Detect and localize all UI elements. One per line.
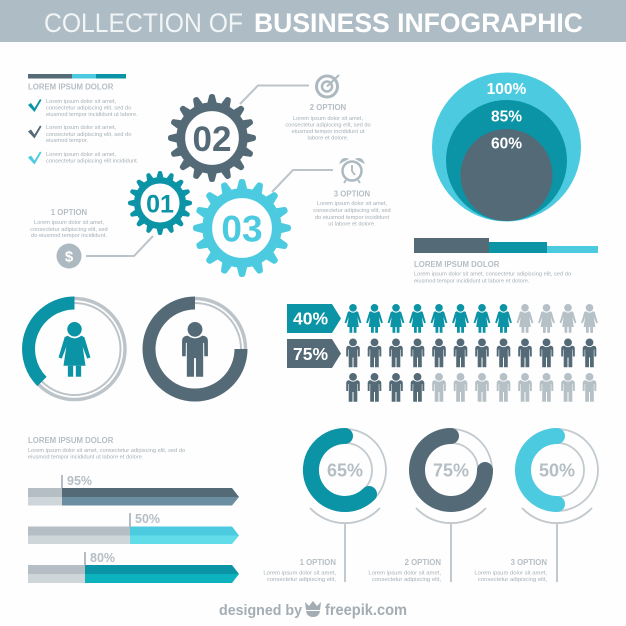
check item 1 bbox=[28, 99, 138, 118]
callout: 1 option: do eiusmod tempor incididunt. bbox=[31, 233, 107, 239]
pictogram row: women 40% bbox=[345, 304, 598, 333]
text block: bars intro: LOREM IPSUM DOLOR bbox=[28, 436, 114, 445]
text block: bars intro bbox=[28, 436, 185, 460]
donut: 50%: 50% bbox=[539, 460, 575, 480]
chart: nested circles: 100% bbox=[487, 81, 527, 98]
callout: 1 option bbox=[30, 208, 153, 268]
option text: Lorem ipsum dolor sit amet, bbox=[474, 570, 547, 576]
stepped legend bar bbox=[414, 238, 598, 253]
checklist heading: LOREM IPSUM DOLOR bbox=[28, 82, 114, 92]
title banner: BUSINESS INFOGRAPHIC bbox=[254, 8, 583, 38]
tag: 75% bbox=[287, 339, 341, 368]
check item 2: eiusmod tempor. bbox=[46, 138, 88, 144]
callout: 2 option: eiusmod tempor incididunt ut bbox=[292, 129, 365, 135]
callout: 1 option: Lorem ipsum dolor sit amet, bbox=[34, 220, 105, 226]
check item 2: consectetur adipiscing elit, sed do bbox=[46, 132, 131, 138]
icon: woman bbox=[59, 322, 90, 377]
footer credit bbox=[219, 601, 407, 619]
text block: circle legend: eiusmod tempor incididunt ut labore et dolore. bbox=[414, 278, 530, 284]
icon: man bbox=[182, 322, 208, 377]
check item 2: Lorem ipsum dolor sit amet, bbox=[46, 125, 117, 131]
text block: circle legend: Lorem ipsum dolor sit amet, consectetur adipiscing elit, sed do bbox=[414, 272, 571, 278]
option text bbox=[474, 558, 547, 583]
gear 01 bbox=[128, 171, 192, 235]
icon: target bbox=[316, 75, 339, 97]
progress bar: 50% bbox=[28, 512, 239, 544]
progress bar: 80%: 80% bbox=[90, 551, 115, 565]
option text: consectetur adipiscing elit, bbox=[478, 577, 547, 583]
icon: freepik crown bbox=[305, 601, 321, 617]
text block: circle legend bbox=[414, 260, 571, 284]
callout: 3 option: ut labore et dolore. bbox=[328, 222, 376, 228]
title banner bbox=[0, 0, 626, 42]
option text: consectetur adipiscing elit, bbox=[372, 577, 441, 583]
connector line bbox=[86, 236, 153, 256]
stand bbox=[522, 508, 592, 582]
callout: 2 option: consectetur adipiscing elit, sed do bbox=[285, 122, 371, 128]
callout: 3 option: 3 OPTION bbox=[334, 190, 371, 198]
icon: alarm clock bbox=[340, 158, 364, 183]
footer credit: designed by bbox=[219, 603, 302, 619]
option text: 1 OPTION bbox=[300, 558, 336, 567]
donut: 75%: 75% bbox=[433, 460, 469, 480]
donut: 50% bbox=[474, 429, 598, 583]
callout: 3 option bbox=[272, 158, 391, 228]
gear 03 bbox=[193, 179, 291, 277]
tag: 75%: 75% bbox=[293, 344, 328, 364]
callout: 2 option bbox=[240, 75, 371, 142]
progress bar: 50%: 50% bbox=[135, 512, 160, 526]
tricolor bar bbox=[28, 74, 126, 78]
title banner: COLLECTION OF bbox=[44, 8, 243, 38]
chart: nested circles: 60% bbox=[491, 136, 522, 152]
pictogram row: men 75% part 1 bbox=[346, 338, 596, 367]
chart: nested circles bbox=[432, 72, 581, 222]
pictogram row: men 75% part 2 bbox=[346, 373, 596, 402]
tag: 40% bbox=[287, 304, 341, 333]
ring: man bbox=[144, 298, 246, 400]
option text: Lorem ipsum dolor sit amet, bbox=[368, 570, 441, 576]
callout: 2 option: 2 OPTION bbox=[310, 103, 347, 112]
gear 01: 01 bbox=[146, 190, 174, 218]
check item 1: Lorem ipsum dolor sit amet, bbox=[46, 99, 117, 105]
donut: 75% bbox=[368, 429, 492, 583]
option text: consectetur adipiscing elit, bbox=[267, 577, 336, 583]
check item 2 bbox=[28, 125, 131, 144]
icon: dollar: $ bbox=[65, 248, 74, 266]
callout: 1 option: 1 OPTION bbox=[51, 208, 88, 217]
text block: circle legend: LOREM IPSUM DOLOR bbox=[414, 260, 500, 269]
connector line bbox=[272, 170, 333, 192]
callout: 3 option: consectetur adipiscing elit, sed bbox=[313, 208, 391, 214]
chart: nested circles: 85% bbox=[491, 108, 522, 126]
callout: 1 option: consectetur adipiscing elit, sed bbox=[30, 227, 108, 233]
progress bar: 95%: 95% bbox=[67, 474, 92, 488]
gear 03: 03 bbox=[221, 208, 263, 250]
donut: 65% bbox=[263, 429, 386, 583]
donut: 65%: 65% bbox=[327, 460, 363, 480]
option text bbox=[368, 558, 441, 583]
callout: 2 option: labore et dolore. bbox=[307, 136, 349, 142]
check item 3 bbox=[28, 152, 139, 164]
check item 3: Lorem ipsum dolor sit amet, bbox=[46, 152, 117, 158]
text block: bars intro: eiusmod tempor incididunt ut labore et dolore. bbox=[28, 454, 144, 460]
text block: bars intro: Lorem ipsum dolor sit amet, consectetur adipiscing elit, sed do bbox=[28, 448, 185, 454]
footer credit: freepik.com bbox=[325, 602, 407, 619]
stand bbox=[416, 508, 486, 582]
check item 1: eiusmod tempor incididunt ut labore. bbox=[46, 112, 138, 118]
callout: 3 option: do eiusmod tempor incididunt bbox=[315, 215, 390, 221]
callout: 3 option: Lorem ipsum dolor sit amet, bbox=[317, 201, 388, 207]
tag: 40%: 40% bbox=[293, 308, 328, 328]
connector line bbox=[240, 86, 309, 104]
gear 02: 02 bbox=[193, 120, 231, 159]
gear 02 bbox=[168, 94, 256, 182]
progress bar: 80% bbox=[28, 551, 239, 583]
option text bbox=[263, 558, 336, 583]
check item 1: consectetur adipiscing elit, sed do bbox=[46, 106, 131, 112]
callout: 2 option: Lorem ipsum dolor sit amet, bbox=[293, 116, 364, 122]
ring: woman bbox=[24, 298, 125, 400]
stand bbox=[310, 508, 380, 582]
panel: checklist bbox=[28, 74, 139, 164]
option text: 3 OPTION bbox=[511, 558, 547, 567]
option text: 2 OPTION bbox=[405, 558, 441, 567]
progress bar: 95% bbox=[28, 474, 239, 506]
check item 3: consectetur adipiscing elit incididunt. bbox=[46, 158, 139, 164]
option text: Lorem ipsum dolor sit amet, bbox=[263, 570, 336, 576]
